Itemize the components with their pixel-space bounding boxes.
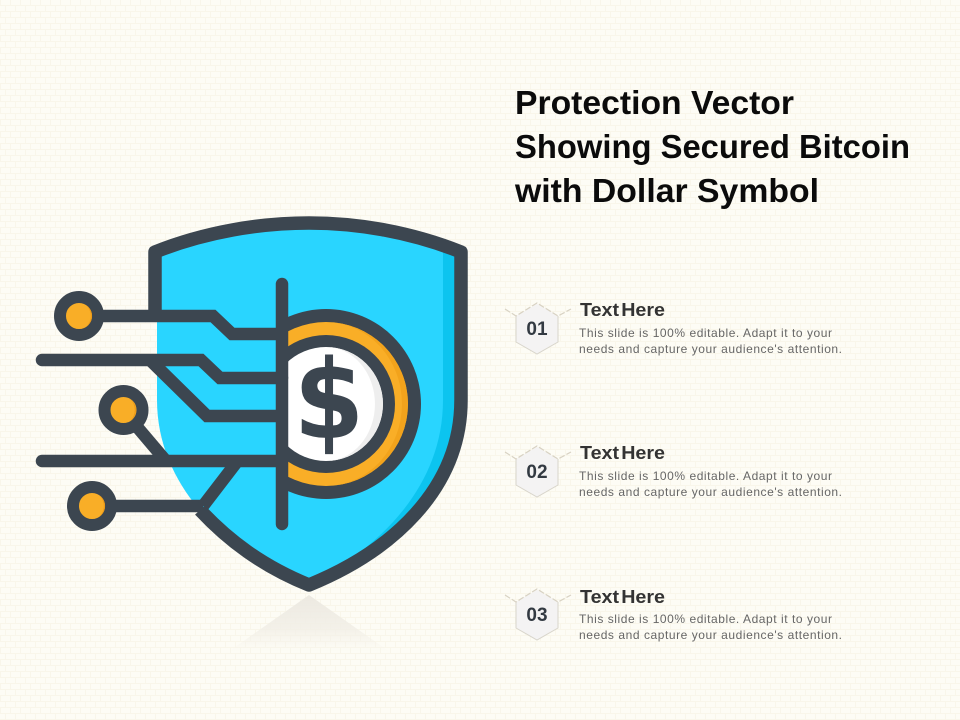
item 01 [505, 300, 842, 356]
shield outline [155, 223, 461, 585]
shield reflection [228, 595, 390, 652]
dollar symbol: $ [294, 336, 364, 464]
item heading 01: Text Here [580, 300, 665, 320]
hexagon badge 01 [505, 303, 571, 354]
item body 02: This slide is 100% editable. Adapt it to your [579, 469, 832, 483]
shield fill [157, 223, 461, 585]
item heading 02: Text Here [580, 443, 665, 463]
item body 02: needs and capture your audience's attention. [579, 485, 842, 499]
node 2 [104, 391, 142, 429]
circuit lines [42, 284, 282, 524]
item body 03: needs and capture your audience's attention. [579, 628, 842, 642]
hexagon badge 02: 02 [526, 462, 548, 483]
item 03 [505, 587, 842, 642]
hexagon badge 01: 01 [526, 319, 548, 340]
coin [288, 309, 421, 499]
item 02 [505, 443, 842, 499]
title: Showing Secured Bitcoin [515, 128, 910, 165]
hexagon badge 02 [505, 446, 571, 497]
shield inner shade [309, 250, 461, 585]
node 1 [60, 297, 98, 335]
hexagon badge 03: 03 [526, 605, 548, 626]
item body 01: needs and capture your audience's attention. [579, 342, 842, 356]
node 3 [73, 487, 111, 525]
hexagon badge 03 [505, 589, 571, 640]
title: Protection Vector [515, 84, 794, 121]
item body 01: This slide is 100% editable. Adapt it to your [579, 326, 832, 340]
item body 03: This slide is 100% editable. Adapt it to your [579, 612, 832, 626]
title: with Dollar Symbol [514, 172, 819, 209]
item heading 03: Text Here [580, 587, 665, 607]
icon: shield with circuit lines and dollar coin [42, 223, 461, 585]
